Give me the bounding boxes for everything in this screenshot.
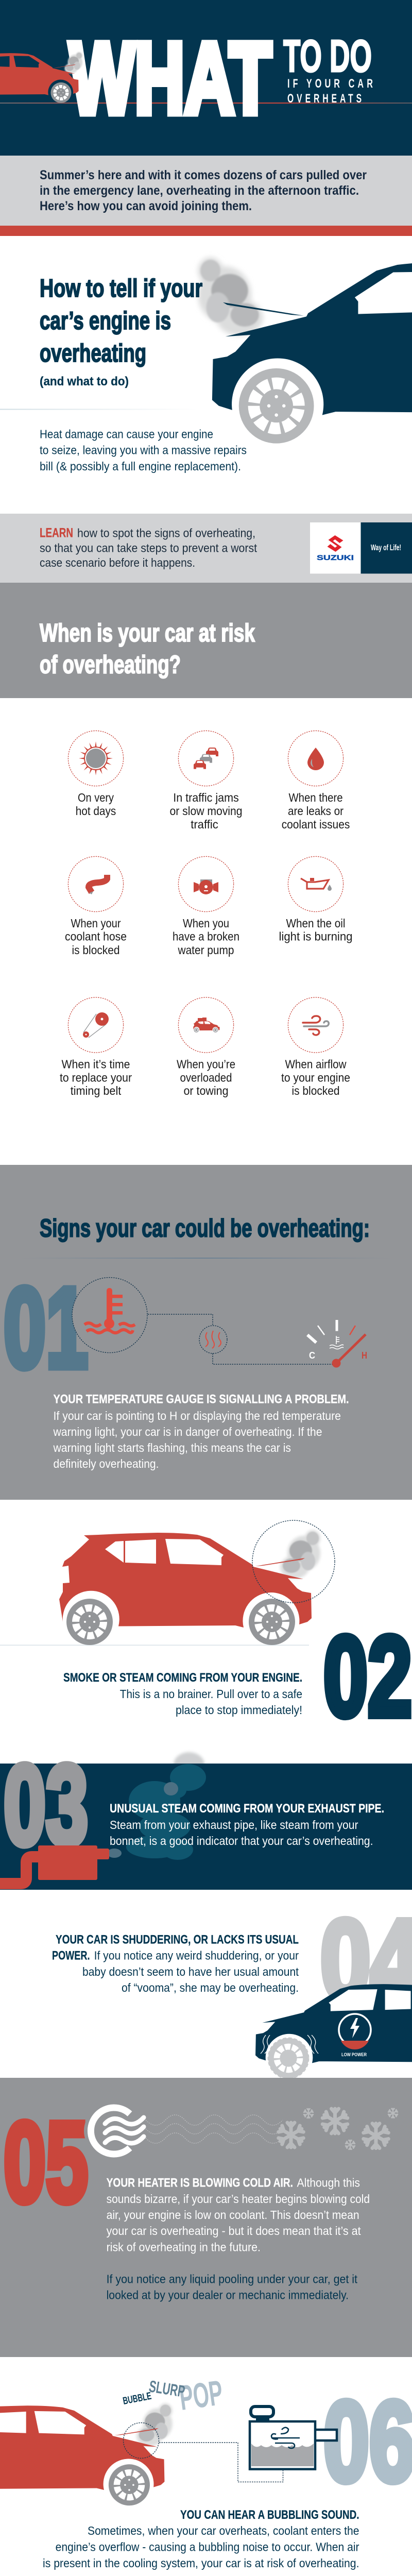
heading: how to tell: car’s engine is xyxy=(40,307,171,335)
icon: shuddering navy car xyxy=(255,1984,412,2078)
number 05: 05 xyxy=(4,2098,88,2226)
body text: Heat damage can cause your engine xyxy=(40,428,213,441)
text: sign 6: Sometimes, when your car overheats, coolant enters the xyxy=(88,2524,359,2537)
risk: traffic: traffic xyxy=(191,818,218,831)
panel: intro band xyxy=(0,156,412,236)
panel: learn band xyxy=(0,514,412,583)
risk: leaks: are leaks or xyxy=(288,804,344,818)
panel: sign 04 xyxy=(52,1896,412,2078)
risk: water pump: have a broken xyxy=(173,930,239,943)
heading: of overheating? xyxy=(40,651,181,679)
icon: heat waves xyxy=(199,1326,227,1353)
text: sign 4: POWER. xyxy=(52,1948,90,1963)
text: sign 3: bonnet, is a good indicator that your car’s overheating. xyxy=(110,1834,373,1848)
risk: hot days xyxy=(68,731,124,818)
text: sign 6: engine’s overflow - causing a bubbling noise to occur. When air xyxy=(56,2540,359,2553)
icon: temperature gauge: C xyxy=(309,1350,315,1361)
learn text: LEARN xyxy=(40,526,73,540)
risk: water pump xyxy=(173,856,239,957)
text: sign 5: If you notice any liquid pooling under your car, get it xyxy=(107,2273,358,2286)
text: sign 1: YOUR TEMPERATURE GAUGE IS SIGNALLING A PROBLEM. xyxy=(54,1392,349,1406)
text: sign 5: your car is overheating - but it does mean that it’s at xyxy=(107,2224,361,2238)
icon: low power battery: LOW POWER xyxy=(341,2052,367,2057)
sound words: POP xyxy=(177,2373,225,2418)
intro text: Here’s how you can avoid joining them. xyxy=(40,199,252,213)
text: sign 4: If you notice any weird shuddering, or your xyxy=(94,1948,299,1962)
risk: water pump: When you xyxy=(183,917,229,930)
risk: water pump: water pump xyxy=(178,943,234,957)
risk: oil light: light is burning xyxy=(279,930,352,943)
panel: sign 05 xyxy=(0,2078,412,2357)
text: sign 5: sounds bizarre, if your car’s heater begins blowing cold xyxy=(107,2192,370,2206)
connector xyxy=(148,1314,332,1364)
text: sign 4 xyxy=(52,1933,299,1994)
icon: red exhaust muffler xyxy=(0,1845,109,1884)
intro text: Summer’s here and with it comes dozens of cars pulled over xyxy=(40,168,367,182)
connector xyxy=(159,2443,283,2482)
icon: coolant tank xyxy=(250,2406,337,2469)
text: sign 4: YOUR CAR IS SHUDDERING, OR LACKS ITS USUAL xyxy=(56,1933,299,1947)
icon: exhaust steam xyxy=(107,1764,206,1860)
icon: temperature warning light xyxy=(72,1278,147,1353)
sound words: BUBBLE xyxy=(122,2391,152,2407)
panel: sign 02 xyxy=(0,1520,412,1740)
text: sign 5 xyxy=(107,2176,370,2302)
icon: large navy car with smoke xyxy=(198,257,412,444)
heading: how to tell: overheating xyxy=(40,340,146,367)
heading: how to tell xyxy=(40,275,202,367)
risk: hot days: hot days xyxy=(76,804,116,818)
icon: temperature gauge: H xyxy=(362,1350,367,1361)
icon: temperature gauge xyxy=(307,1320,367,1367)
risk: airflow: When airflow xyxy=(285,1057,347,1071)
risk: airflow: to your engine xyxy=(281,1071,350,1084)
icon: red car with smoke xyxy=(0,52,82,103)
text: sign 2: place to stop immediately! xyxy=(176,1703,302,1717)
number 01: 01 xyxy=(4,1264,88,1391)
number 03: 03 xyxy=(4,1741,88,1868)
risk: hot days: On very xyxy=(78,791,114,804)
risk: overloaded: overloaded xyxy=(180,1071,232,1084)
text: sign 5: risk of overheating in the future. xyxy=(107,2240,261,2253)
risk: coolant hose: is blocked xyxy=(72,943,119,957)
risk: coolant hose: coolant hose xyxy=(65,930,127,943)
risk: leaks xyxy=(282,731,350,831)
intro text xyxy=(40,168,367,213)
text: sign 3: Steam from your exhaust pipe, like steam from your xyxy=(110,1818,358,1832)
text: sign 6 xyxy=(43,2508,359,2570)
risk: oil light xyxy=(279,856,352,943)
panel: hero header xyxy=(0,0,412,156)
heading: When is your car at risk xyxy=(40,619,255,647)
icon: red car with smoke xyxy=(59,1520,335,1645)
panel: sign 03 xyxy=(0,1741,412,1890)
risk: overloaded xyxy=(177,997,235,1097)
icon: red car front with smoke xyxy=(0,2403,173,2505)
title: WHAT: WHAT xyxy=(70,22,271,134)
heading: how to tell: How to tell if your xyxy=(40,275,202,302)
risk: timing belt: to replace your xyxy=(60,1071,132,1084)
intro text: in the emergency lane, overheating in the afternoon traffic. xyxy=(40,183,359,198)
panel: sign 06 xyxy=(0,2373,412,2570)
body text xyxy=(40,428,247,473)
panel: risk icon grid xyxy=(60,731,352,1097)
risk: airflow: is blocked xyxy=(291,1084,340,1097)
text: sign 6: YOU CAN HEAR A BUBBLING SOUND. xyxy=(180,2508,359,2522)
risk: timing belt: timing belt xyxy=(71,1084,122,1097)
risk: leaks: When there xyxy=(288,791,343,804)
icon: air vent xyxy=(84,2105,283,2157)
text: sign 5: looked at by your dealer or mechanic immediately. xyxy=(107,2289,349,2302)
text: sign 4: of “vooma”, she may be overheating. xyxy=(122,1981,299,1994)
text: sign 5: air, your engine is low on coolant. This doesn’t mean xyxy=(107,2208,359,2222)
text: sign 3 xyxy=(110,1802,384,1848)
body text: to seize, leaving you with a massive repairs xyxy=(40,444,247,457)
risk: coolant hose xyxy=(65,856,127,957)
text: sign 1: definitely overheating. xyxy=(54,1457,159,1470)
sound words xyxy=(122,2373,225,2418)
logo: suzuki xyxy=(310,522,412,573)
risk: timing belt xyxy=(60,997,132,1097)
subtitle: overheats: OVERHEATS xyxy=(287,92,365,106)
text: sign 4: baby doesn’t seem to have her usual amount xyxy=(82,1965,299,1978)
heading xyxy=(40,619,255,679)
risk: oil light: When the oil xyxy=(286,917,345,930)
risk: coolant hose: When your xyxy=(71,917,121,930)
text: sign 5: Although this xyxy=(297,2176,360,2190)
text: sign 1: If your car is pointing to H or displaying the red temperature xyxy=(54,1409,341,1422)
subheading: (and what to do) xyxy=(40,375,129,388)
icon: snowflakes xyxy=(279,2109,398,2149)
learn text: so that you can take steps to prevent a worst xyxy=(40,541,258,555)
icon: low power battery xyxy=(339,2014,371,2057)
learn text: case scenario before it happens. xyxy=(40,556,195,569)
text: sign 1: warning light starts flashing, this means the car is xyxy=(53,1441,291,1454)
learn text: how to spot the signs of overheating, xyxy=(77,527,255,540)
text: sign 5: YOUR HEATER IS BLOWING COLD AIR. xyxy=(107,2176,293,2190)
risk: overloaded: or towing xyxy=(183,1084,229,1097)
panel: when at risk heading xyxy=(0,583,412,698)
text: sign 2 xyxy=(63,1671,302,1717)
learn text xyxy=(40,526,258,569)
text: sign 2: SMOKE OR STEAM COMING FROM YOUR ENGINE. xyxy=(63,1671,302,1685)
text: sign 1 xyxy=(53,1392,349,1470)
panel: how to tell xyxy=(0,236,412,514)
text: sign 6: is present in the cooling system, your car is at risk of overheating. xyxy=(43,2556,359,2570)
panel: signs heading and sign 01 xyxy=(0,1165,412,1500)
risk: timing belt: When it’s time xyxy=(62,1057,130,1071)
logo: suzuki: SUZUKI xyxy=(317,553,354,562)
risk: traffic: In traffic jams xyxy=(173,791,239,804)
text: sign 1: warning light, your car is in danger of overheating. If the xyxy=(53,1425,322,1438)
risk: leaks: coolant issues xyxy=(282,818,350,831)
text: sign 2: This is a no brainer. Pull over to a safe xyxy=(120,1687,302,1701)
risk: traffic: or slow moving xyxy=(170,804,242,818)
sound words: SLURP xyxy=(148,2377,186,2401)
risk: overloaded: When you’re xyxy=(177,1057,235,1071)
risk: traffic xyxy=(170,731,242,831)
risk: airflow xyxy=(281,997,350,1097)
body text: bill (& possibly a full engine replacement). xyxy=(40,460,241,473)
